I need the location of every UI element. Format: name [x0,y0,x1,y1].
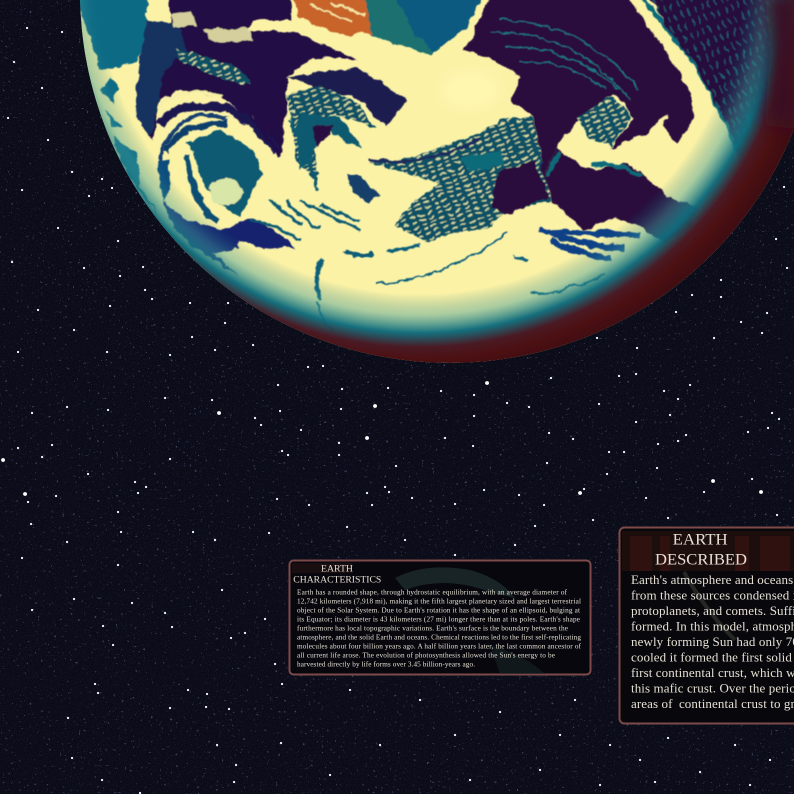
panel: Earth characteristics [290,560,590,674]
text block: characteristics body: all current life arose. The evolution of photosynthesis allowed the Sun's energy to be [297,651,555,659]
text block: characteristics body: atmosphere, and the solid Earth and oceans. Chemical reactions led to the first self-replicating [297,634,581,642]
heading: Earth described [655,531,747,568]
text block: characteristics body: harvested directly by life forms over 3.45 billion-years ago. [297,660,475,668]
dark red shade at upper right [765,0,794,130]
text block: characteristics body: 12,742 kilometers (7,918 mi), making it the fifth largest planetary sized and largest terrestrial [297,598,581,606]
dark region past the cream band, upper right [648,0,777,144]
heading: Earth characteristics: EARTH [321,564,353,575]
heading: Earth described: EARTH [673,531,728,548]
heading: Earth characteristics [293,564,381,586]
dark purple cloud gaps, left [137,0,407,185]
left spiral storm [158,112,380,277]
text block: characteristics body: furthermore has local topographic variations. Earth's surface is the boundary between the [297,624,568,632]
Earth globe [70,0,794,363]
heading: Earth described: DESCRIBED [655,551,747,568]
text block: characteristics body: its Equator; its diameter is 43 kilometers (27 mi) longer there than at its poles. Earth's shape [297,616,580,624]
text block: described body: cooled it formed the first solid [631,649,792,664]
lower cloud streaks [314,226,642,320]
soft shading glow [446,76,494,104]
text block: characteristics body [297,589,582,668]
text block: characteristics body: Earth has a rounded shape, through hydrostatic equilibrium, with an average diameter of [297,589,568,597]
text block: described body [631,572,794,711]
panel texture: characteristics [292,563,545,674]
dark purple storm mass, right [464,0,737,243]
text block: characteristics body: molecules about four billion years ago. A half billion years later, the last common ancestor of [297,642,582,650]
panel texture: described [622,531,794,640]
teal hatched cloud bands, centre [370,117,551,242]
atmospheric limb: teal to dark red [80,0,794,363]
top-left teal ocean patches [80,0,156,214]
planet cream cloud base [80,0,794,363]
orange and teal land at top [287,0,490,55]
text block: characteristics body: object of the Solar System. Due to Earth's rotation it has the shape of an ellipsoid, bulging at [297,607,580,615]
heading: Earth characteristics: CHARACTERISTICS [293,575,381,586]
panel: Earth described [620,528,794,724]
